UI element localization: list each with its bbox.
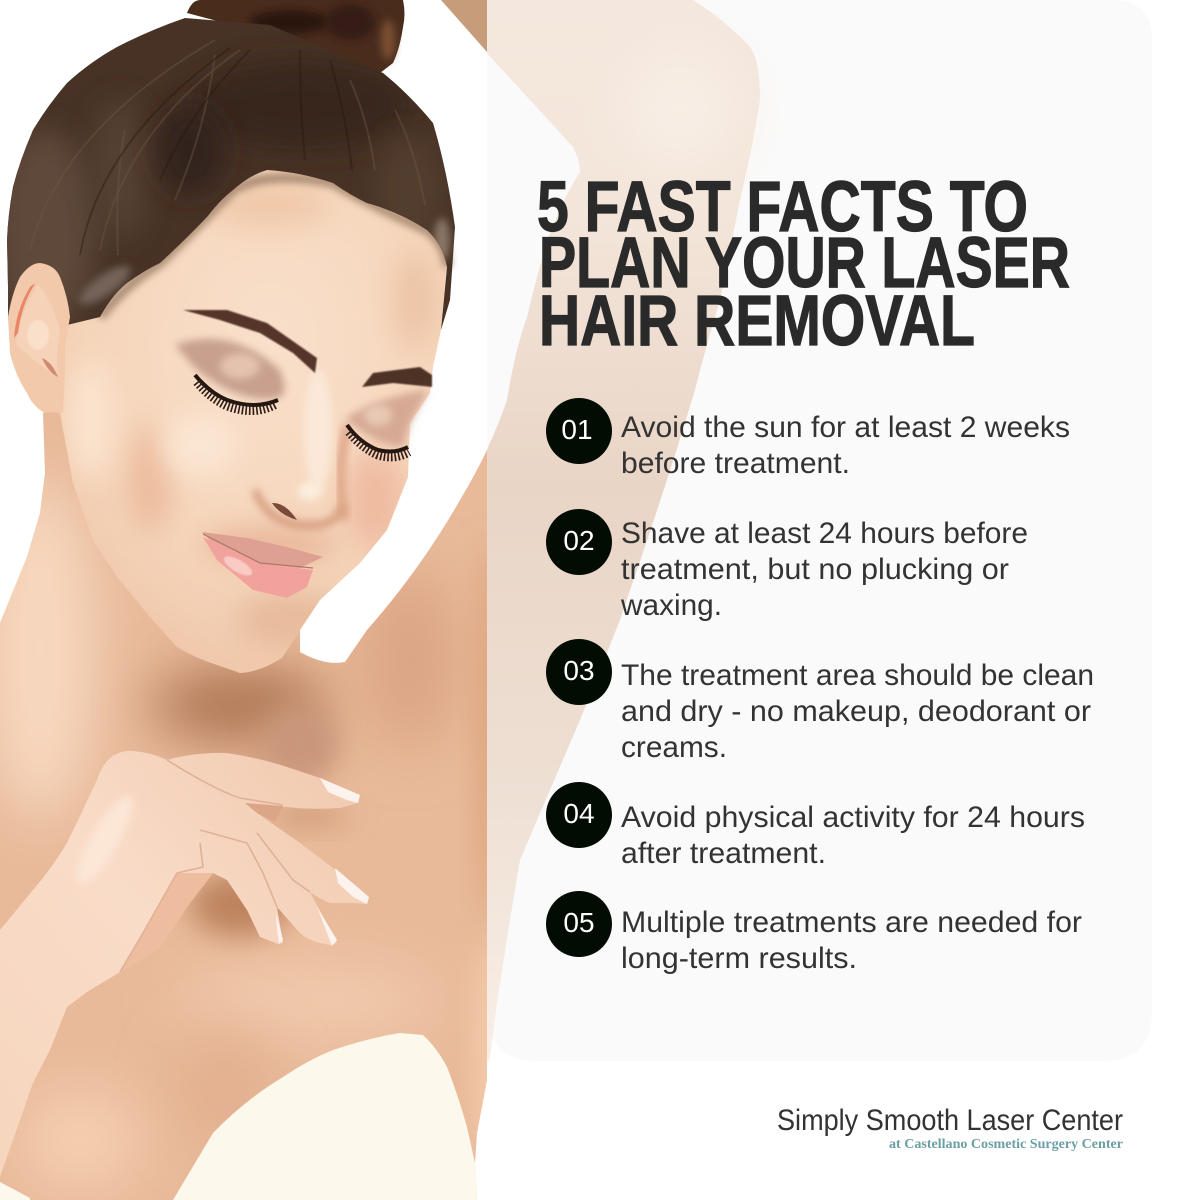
logo: Simply Smooth Laser Center: [777, 1104, 1123, 1137]
fact 05: [546, 891, 1082, 975]
highlight on back of hand: [78, 796, 134, 882]
fact 03: [546, 639, 1094, 764]
fact 01 text: Avoid the sun for at least 2 weeks: [621, 411, 1070, 444]
fact 03 text: creams.: [621, 731, 727, 764]
bun: [187, 0, 404, 73]
forearm above panel edge: [441, 0, 487, 52]
lips: [202, 532, 323, 598]
number badge 05: [546, 891, 612, 957]
fact 05 text: Multiple treatments are needed for: [621, 906, 1082, 939]
fact 03 text: and dry - no makeup, deodorant or: [621, 695, 1091, 728]
body and raised arm: [0, 390, 502, 1200]
ear: [8, 263, 70, 413]
hand with fingers: [0, 751, 369, 1177]
number badge 02: [546, 509, 612, 575]
fact 01: [546, 398, 1070, 480]
panel: facts background: [487, 0, 1152, 1061]
number badge 03: [546, 639, 612, 705]
fact 01 text: before treatment.: [621, 447, 850, 480]
fact 04 text: Avoid physical activity for 24 hours: [621, 801, 1085, 834]
eyebrows: [183, 310, 432, 387]
title: [537, 168, 1070, 361]
fact 03 text: [621, 659, 1094, 764]
title: 5 FAST FACTS TO: [537, 168, 1028, 247]
number badge 03: 03: [563, 655, 595, 686]
number badge 01: [546, 398, 612, 464]
fact 04 text: after treatment.: [621, 837, 826, 870]
fact 04: [546, 782, 1085, 870]
raised arm seen through panel: [487, 0, 760, 1061]
fact 02 text: [620, 517, 1028, 622]
finger creases: [120, 760, 310, 972]
hair and bun: [0, 0, 470, 340]
logo: [777, 1104, 1123, 1151]
palm underside: [120, 873, 213, 972]
face: [52, 165, 450, 673]
title: HAIR REMOVAL: [539, 282, 975, 361]
fact 05 text: [621, 906, 1082, 975]
logo: at Castellano Cosmetic Surgery Center: [889, 1136, 1123, 1151]
title: PLAN YOUR LASER: [539, 224, 1070, 303]
fact 02 text: Shave at least 24 hours before: [621, 517, 1028, 550]
fact 01 text: [621, 411, 1070, 480]
fact 04 text: [621, 801, 1085, 870]
fact 05 text: long-term results.: [621, 942, 857, 975]
fingernails: [276, 778, 369, 946]
fact 02 text: treatment, but no plucking or: [621, 553, 1009, 586]
number badge 04: 04: [563, 798, 595, 829]
number badge 05: 05: [563, 907, 595, 938]
number badge 04: [546, 782, 612, 848]
fact 03 text: The treatment area should be clean: [621, 659, 1094, 692]
woman photo illustration: [0, 0, 502, 1200]
number badge 02: 02: [563, 525, 595, 556]
fact 02 text: waxing.: [620, 589, 722, 622]
hair fuzz along hairline: [100, 178, 447, 317]
fact 02: [546, 509, 1028, 622]
garment: [0, 1033, 477, 1200]
nose: [272, 482, 322, 520]
gap between fingers: [245, 803, 283, 822]
closed eyes: [175, 339, 428, 457]
hair mass: [7, 18, 455, 330]
number badge 01: 01: [561, 414, 593, 445]
